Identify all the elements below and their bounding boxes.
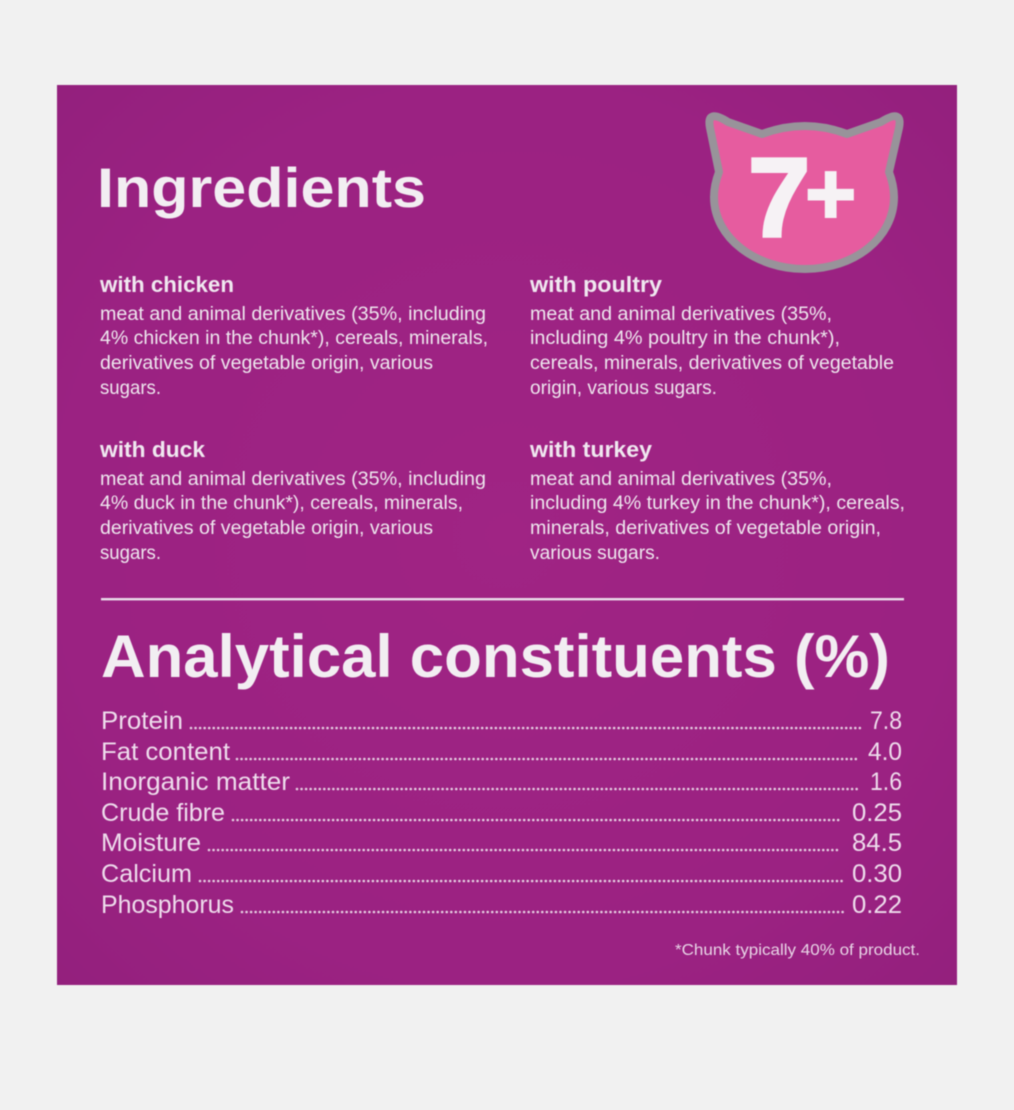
text block: with chicken: with chicken [99,272,234,297]
row: Phosphorus: Phosphorus [101,891,234,919]
text block: with turkey: various sugars. [530,542,660,564]
row: Calcium: Calcium [101,860,192,888]
text block: with chicken: meat and animal derivatives (35%, including [100,303,486,325]
heading: Analytical constituents: Analytical constituents (%) [101,623,890,690]
row: Inorganic matter: 1.6 [870,768,902,796]
row: Phosphorus [101,891,902,919]
text block: with turkey: including 4% turkey in the chunk*), cereals, [530,492,905,514]
footnote: *Chunk typically 40% of product. [675,942,920,959]
row: Calcium: 0.30 [852,860,902,888]
icon: cat head 7+ badge [709,116,900,269]
row: Crude fibre: Crude fibre [101,799,225,827]
text block: with duck: sugars. [100,542,161,564]
text block: with turkey: minerals, derivatives of vegetable origin, [530,517,881,539]
text block: with poultry: cereals, minerals, derivatives of vegetable [530,352,894,374]
row: Phosphorus: 0.22 [852,891,902,919]
text block: with chicken: 4% chicken in the chunk*), cereals, minerals, [100,327,488,349]
row: Calcium [101,860,902,888]
text block: with turkey: with turkey [529,437,653,462]
row: Moisture: 84.5 [852,829,902,857]
text block: with duck: 4% duck in the chunk*), cereals, minerals, [100,492,463,514]
text block: with poultry: including 4% poultry in the chunk*), [530,327,840,349]
text block: with duck: derivatives of vegetable origin, various [100,517,433,539]
text block: with poultry [529,272,894,399]
text block: with turkey: meat and animal derivatives (35%, [530,468,832,490]
row: Inorganic matter: Inorganic matter [101,768,290,796]
row: Moisture [101,829,902,857]
text block: with turkey [529,437,905,564]
row: Fat content: 4.0 [868,738,902,766]
badge text: 7: 7 [748,135,810,260]
row: Fat content: Fat content [101,738,230,766]
badge text: plus: + [805,144,856,243]
text block: with poultry: meat and animal derivatives (35%, [530,303,832,325]
row: Protein [101,707,902,735]
text block: with poultry: with poultry [529,272,663,297]
text block: with duck: with duck [99,437,206,462]
text block: with chicken: sugars. [100,377,161,399]
row: Moisture: Moisture [101,829,201,857]
row: Inorganic matter [101,768,902,796]
row: Fat content [101,738,902,766]
text block: with duck [99,437,486,564]
row: Crude fibre [101,799,902,827]
panel: purple label [57,85,957,985]
text block: with chicken: derivatives of vegetable origin, various [100,352,433,374]
text block: with poultry: origin, various sugars. [530,377,717,399]
text block: with duck: meat and animal derivatives (35%, including [100,468,486,490]
table: analytical constituents [101,707,902,919]
row: Protein: Protein [101,707,183,735]
text block: with chicken [99,272,488,399]
row: Crude fibre: 0.25 [852,799,902,827]
row: Protein: 7.8 [870,707,902,735]
heading: Ingredients: Ingredients [97,156,426,219]
